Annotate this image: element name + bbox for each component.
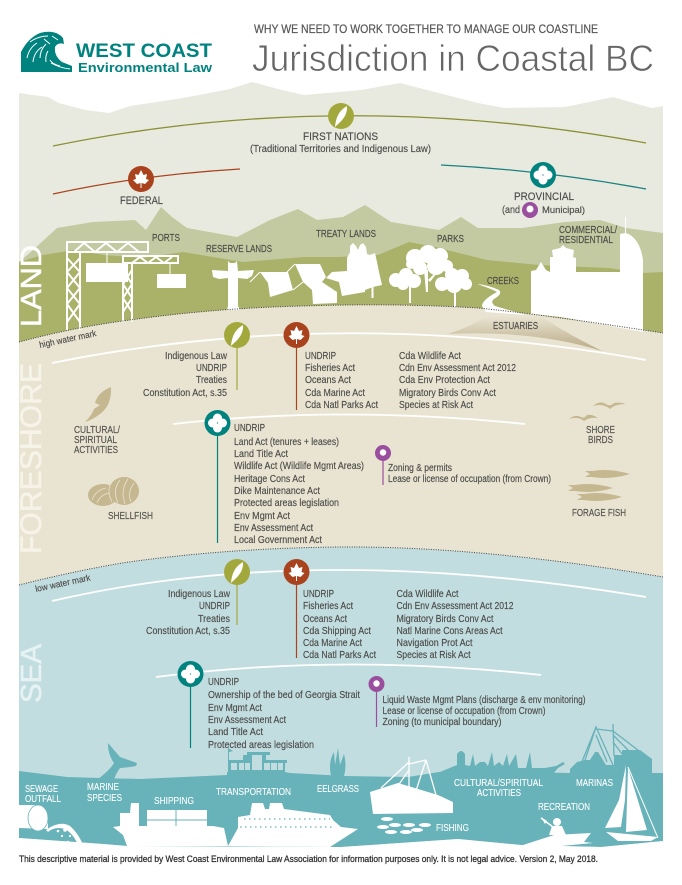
foreshore: first nations laws: Treaties [196, 374, 227, 386]
foreshore: federal laws: Migratory Birds Conv Act [399, 387, 496, 399]
land labels: PORTS [152, 232, 180, 244]
icon: eelgrass [330, 748, 346, 776]
icon: maple leaf [128, 166, 154, 192]
land features: totem pole [212, 261, 254, 310]
foreshore: municipal laws: Zoning & permits [388, 463, 452, 474]
sea: provincial laws [178, 661, 360, 751]
sea: first nations laws [146, 559, 250, 637]
shellfish icon and label [88, 477, 153, 522]
provincial jurisdiction arc: PROVINCIAL [514, 191, 574, 203]
sea: federal laws: Fisheries Act [303, 600, 353, 612]
coastal scene: kayak [523, 817, 593, 847]
foreshore: provincial laws: UNDRIP [234, 422, 265, 434]
icon: whale tail [98, 743, 137, 780]
sea: provincial laws: Ownership of the bed of Georgia Strait [208, 689, 360, 701]
sea: federal laws: Cda Natl Parks Act [303, 649, 376, 661]
coastal scene: white shoreline [19, 838, 663, 852]
foreshore: first nations laws: UNDRIP [196, 362, 227, 374]
icon: people silhouettes [440, 751, 565, 782]
land features: city skyline [531, 217, 643, 332]
foreshore: provincial laws: Env Assessment Act [234, 522, 313, 534]
coastal scene labels: MARINAS [576, 777, 613, 789]
sea: provincial laws: Env Mgmt Act [208, 702, 262, 714]
sea white arcs [52, 570, 646, 677]
provincial jurisdiction arc [441, 162, 646, 218]
coastal scene labels: ACTIVITIES [477, 787, 521, 799]
coastal scene labels: EELGRASS [317, 783, 359, 795]
foreshore: provincial laws: Protected areas legislation [234, 497, 339, 509]
foreshore: federal laws: Cda Natl Parks Act [305, 399, 378, 411]
estuary: ESTUARIES [493, 320, 538, 332]
shellfish icon and label: SHELLFISH [108, 511, 153, 522]
coastal scene: container ship [113, 803, 228, 846]
label: high water mark: high water mark [38, 328, 98, 350]
first nations jurisdiction arc: FIRST NATIONS [303, 131, 378, 143]
cultural activities: feather icon and label: CULTURAL/ [74, 425, 120, 436]
forage fish icon and label: FORAGE FISH [572, 508, 626, 519]
icon: municipal pin [522, 202, 538, 218]
sea: federal laws: Oceans Act [303, 613, 347, 625]
cultural activities: feather icon and label: SPIRITUAL [74, 435, 117, 446]
sea: federal laws: Natl Marine Cons Areas Act [396, 625, 503, 637]
land labels: TREATY LANDS [316, 228, 376, 240]
foreshore panel [19, 305, 663, 590]
sea: provincial laws: UNDRIP [208, 676, 239, 688]
title: Jurisdiction in Coastal BC [252, 38, 654, 79]
coastal scene labels: FISHING [436, 822, 469, 834]
sea: municipal laws: Liquid Waste Mgmt Plans (discharge & env monitoring) [382, 695, 586, 706]
forage fish icon and label [568, 470, 630, 519]
coastal scene labels: SEWAGE [25, 783, 58, 795]
sea: first nations laws: Treaties [198, 613, 230, 625]
coastal scene labels: SHIPPING [154, 795, 194, 807]
estuary [448, 316, 602, 351]
side label: SEA: SEA [16, 643, 48, 703]
coastal scene labels: MARINE [87, 781, 119, 793]
coastal scene: silhouettes above the water [98, 724, 663, 782]
land labels: RESERVE LANDS [206, 243, 272, 255]
land features: houses [250, 264, 365, 304]
icon: feather [328, 103, 354, 129]
foreshore white arcs [52, 333, 646, 424]
coastal scene: school of fish [377, 817, 431, 834]
sea: municipal laws: Lease or license of occupation (from Crown) [382, 706, 546, 717]
provincial jurisdiction arc: (and [502, 204, 520, 216]
foreshore: first nations laws [143, 322, 250, 399]
coastal scene labels: SPECIES [87, 792, 122, 804]
sea: first nations laws: Indigenous Law [168, 588, 230, 600]
shore birds icon and label [569, 402, 626, 446]
land labels [152, 224, 617, 287]
sea: federal laws: Cdn Env Assessment Act 2012 [396, 600, 514, 612]
foreshore: municipal laws: Lease or license of occupation (from Crown) [388, 474, 551, 485]
sea: federal laws: Migratory Birds Conv Act [396, 613, 494, 625]
land features: trees [347, 243, 472, 307]
sea: federal laws: Cda Shipping Act [303, 625, 371, 637]
foreshore: provincial laws: Local Government Act [234, 534, 322, 546]
coastal scene labels: OUTFALL [25, 793, 61, 805]
foreshore: federal laws: Cda Env Protection Act [399, 374, 490, 386]
high water mark line [19, 305, 663, 342]
first nations jurisdiction arc: (Traditional Territories and Indigenous Law) [250, 143, 431, 155]
sea: first nations laws: UNDRIP [199, 600, 230, 612]
sea: provincial laws: Env Assessment Act [208, 714, 286, 726]
foreshore: federal laws [284, 322, 516, 411]
foreshore: federal laws: Cda Marine Act [305, 387, 365, 399]
sea: municipal laws [368, 676, 586, 728]
side label: FORESHORE: FORESHORE [15, 363, 48, 554]
provincial jurisdiction arc: Municipal) [542, 205, 585, 216]
land labels: COMMERCIAL/ [559, 224, 617, 236]
land labels: CREEKS [487, 275, 519, 287]
sea: federal laws [284, 559, 514, 661]
coastal scene: water band [19, 771, 663, 847]
cultural activities: feather icon and label: ACTIVITIES [74, 445, 118, 456]
side label: LAND: LAND [16, 245, 48, 327]
shore birds icon and label: SHORE [586, 425, 615, 436]
icon: dogwood flower [530, 162, 556, 188]
sea: municipal laws: Zoning (to municipal boundary) [382, 717, 502, 728]
federal jurisdiction arc [53, 166, 240, 207]
foreshore: first nations laws: Indigenous Law [165, 350, 227, 362]
logo: West Coast Environmental Law: WEST COAST [76, 41, 212, 62]
federal jurisdiction arc: FEDERAL [120, 195, 163, 207]
land features: creek [477, 284, 526, 315]
sea: federal laws: Cda Marine Act [303, 637, 362, 649]
coastal scene labels [25, 777, 613, 834]
foreshore: federal laws: Fisheries Act [305, 362, 355, 374]
low water mark line [19, 547, 663, 585]
land panel: sky and mountains [19, 82, 663, 345]
coastal scene: passenger ferry [228, 803, 358, 847]
coastal scene: sailboat [605, 765, 658, 841]
coastal scene labels: TRANSPORTATION [216, 786, 291, 798]
foreshore: provincial laws: Dike Maintenance Act [234, 485, 320, 497]
foreshore: provincial laws: Wildlife Act (Wildlife Mgmt Areas) [234, 460, 364, 472]
foreshore: federal laws: Oceans Act [305, 374, 351, 386]
foreshore: first nations laws: Constitution Act, s.35 [143, 387, 227, 399]
coastal scene labels: CULTURAL/SPIRITUAL [454, 777, 543, 789]
sea: federal laws: Navigation Prot Act [396, 637, 473, 649]
logo: West Coast Environmental Law [21, 32, 213, 75]
coastal scene: fishing boat [370, 757, 453, 814]
foreshore: federal laws: Cdn Env Assessment Act 2012 [399, 362, 516, 374]
land features: crane port [67, 242, 186, 330]
logo: West Coast Environmental Law: Environmental Law [78, 60, 213, 75]
sea: federal laws: Cda Wildlife Act [396, 588, 459, 600]
foreshore: provincial laws: Env Mgmt Act [234, 510, 290, 522]
sea: provincial laws: Land Title Act [208, 726, 263, 738]
land labels: PARKS [437, 233, 464, 245]
foreshore: federal laws: Cda Wildlife Act [399, 350, 461, 362]
foreshore: provincial laws [204, 410, 364, 546]
sea: first nations laws: Constitution Act, s.35 [146, 625, 230, 637]
foreshore: provincial laws: Land Title Act [234, 448, 288, 460]
sea: federal laws: Species at Risk Act [396, 649, 471, 661]
shore birds icon and label: BIRDS [588, 435, 613, 446]
first nations jurisdiction arc [53, 103, 646, 155]
sea: federal laws: UNDRIP [303, 588, 334, 600]
subtitle: WHY WE NEED TO WORK TOGETHER TO MANAGE OUR COASTLINE [254, 22, 598, 36]
sea: provincial laws: Protected areas legislation [208, 739, 314, 751]
foreshore: federal laws: Species at Risk Act [399, 399, 473, 411]
sea panel [19, 547, 663, 850]
label: low water mark: low water mark [34, 572, 92, 594]
foreshore: provincial laws: Land Act (tenures + leases) [234, 436, 339, 448]
coastal scene labels: RECREATION [538, 801, 590, 813]
foreshore: municipal laws [375, 445, 551, 485]
icon: ferry silhouette [227, 748, 290, 780]
cultural activities: feather icon and label [74, 387, 120, 456]
icon: marina boats [570, 750, 663, 782]
foreshore: federal laws: UNDRIP [305, 350, 336, 362]
foreshore: provincial laws: Heritage Cons Act [234, 473, 305, 485]
land labels: RESIDENTIAL [559, 234, 613, 246]
footer disclaimer: This descriptive material is provided by West Coast Environmental Law Association for information purposes only. It is not legal advice. Version 2, May 2018. [19, 854, 598, 865]
coastal scene: sewage outfall [19, 805, 84, 848]
